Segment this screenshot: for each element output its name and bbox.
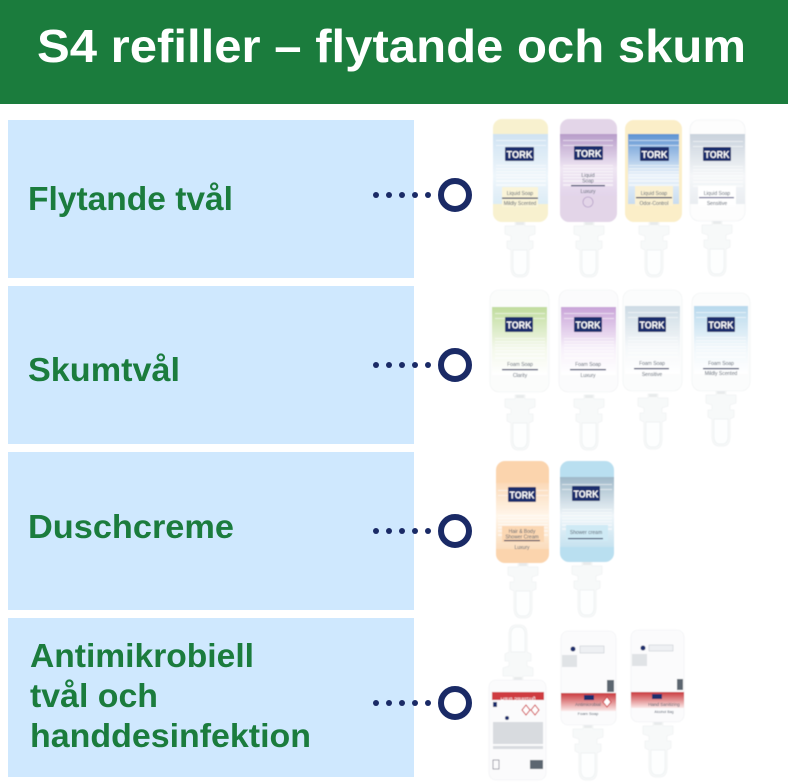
product: Antimicrobial Foam Soap: Antimicrobial (575, 702, 601, 707)
product: Liquid Soap Sensitive: Liquid Soap (704, 191, 730, 197)
product: Shower cream: Shower cream (570, 530, 602, 536)
heading: Skumtvål: Skumtvål (28, 351, 180, 388)
product: Hand Sanitizing Alcohol Bag: Hand Sanitizing (648, 702, 680, 707)
heading: Antimikrobiell tvål och handdesinfektion: handdesinfektion (30, 717, 311, 754)
product: Liquid Soap Odor-Control: Odor-Control (640, 201, 668, 207)
product: Foam Soap Sensitive: TORK (640, 320, 665, 332)
heading: Duschcreme: Duschcreme (28, 508, 234, 545)
heading: Flytande tvål: Flytande tvål (28, 180, 233, 217)
product: Foam Soap Clarity: Clarity (513, 373, 528, 379)
product: Liquid Soap Odor-Control (625, 120, 682, 277)
connector: row 2 (373, 351, 469, 379)
product: Liquid Soap Luxury: Liquid (581, 173, 595, 179)
product: Liquid Soap Luxury (560, 119, 617, 277)
product: Liquid Soap Mildly Scented (493, 119, 548, 277)
product: Foam Soap Mildly Scented: TORK (708, 320, 734, 332)
product: Foam Soap Clarity: Foam Soap (507, 362, 533, 368)
product: Liquid Soap Luxury: Luxury (580, 189, 596, 195)
product: Hair & Body Shower Cream Luxury (496, 461, 549, 618)
product: Hair & Body Shower Cream Luxury: Shower Cream (505, 534, 539, 540)
panel: Flytande tvål (8, 120, 414, 278)
panel: Antimikrobiell tvål och handdesinfektion (8, 618, 414, 777)
product: Liquid Soap Sensitive: TORK (704, 149, 730, 161)
panel: Skumtvål (8, 286, 414, 444)
product: Foam Soap Luxury: Luxury (580, 373, 596, 379)
product: Hair & Body Shower Cream Luxury: TORK (510, 490, 535, 502)
product: Foam Soap Mildly Scented: Foam Soap (708, 361, 734, 367)
product: Antimicrobial Foam Soap (561, 631, 616, 780)
product: Liquid Soap Mildly Scented: Mildly Scented (504, 201, 536, 207)
product: Foam Soap Clarity: TORK (506, 320, 532, 332)
product: Liquid Soap Luxury: Soap (582, 178, 594, 184)
product: Foam Soap Mildly Scented (692, 293, 750, 446)
product: upside-down hand sanitizer: Hand Sanitizing (500, 696, 536, 702)
product: Liquid Soap Mildly Scented: Liquid Soap (507, 191, 533, 197)
product: Hair & Body Shower Cream Luxury: Luxury (514, 545, 530, 551)
heading: Antimikrobiell tvål och handdesinfektion: Antimikrobiell (30, 637, 254, 674)
product: Hair & Body Shower Cream Luxury: Hair & Body (509, 529, 536, 535)
product: Shower cream: TORK (574, 488, 599, 500)
heading: Antimikrobiell tvål och handdesinfektion (30, 637, 311, 754)
product: Liquid Soap Odor-Control: TORK (642, 149, 668, 161)
connector: row 4 (373, 689, 469, 717)
product: Shower cream (560, 461, 614, 617)
title: S4 refiller – flytande och skum (37, 20, 746, 72)
product: Antimicrobial Foam Soap: Foam Soap (578, 711, 599, 716)
product: Hand Sanitizing Alcohol Bag: Alcohol Bag (654, 710, 674, 714)
product: upside-down hand sanitizer (489, 625, 546, 780)
product: Foam Soap Luxury: TORK (576, 320, 601, 332)
product: Foam Soap Sensitive: Foam Soap (639, 361, 665, 367)
connector: row 3 (373, 517, 469, 545)
heading: Antimikrobiell tvål och handdesinfektion: tvål och (30, 677, 158, 714)
product: Foam Soap Luxury (559, 290, 618, 450)
header banner (0, 0, 788, 104)
product: Foam Soap Sensitive: Sensitive (642, 372, 662, 378)
product: Foam Soap Mildly Scented: Mildly Scented (705, 371, 737, 377)
product: Liquid Soap Sensitive (690, 120, 745, 276)
product: Foam Soap Clarity (490, 290, 549, 450)
panel: Duschcreme (8, 452, 414, 610)
product: Foam Soap Luxury: Foam Soap (575, 362, 601, 368)
product: Hand Sanitizing Alcohol Bag (631, 630, 684, 777)
product: Foam Soap Sensitive (623, 290, 682, 449)
connector: row 1 (373, 181, 469, 209)
product: Liquid Soap Sensitive: Sensitive (707, 201, 727, 207)
product: Liquid Soap Odor-Control: Liquid Soap (641, 191, 667, 197)
product: Liquid Soap Mildly Scented: TORK (506, 149, 533, 161)
product: Liquid Soap Luxury: TORK (576, 148, 602, 160)
